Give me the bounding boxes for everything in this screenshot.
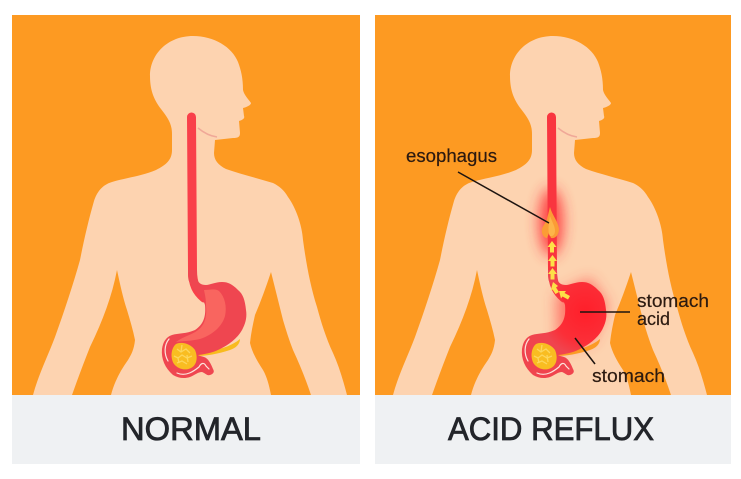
stomach organ [162,270,246,378]
stomach organ [522,270,606,378]
fat sliver [197,339,240,356]
panel: normal [12,15,360,464]
stomach wall [162,270,246,378]
label: stomach acid: stomach [637,291,709,311]
label: esophagus: esophagus [406,146,497,166]
yellow food mass [532,343,557,369]
jaw shadow [558,128,577,137]
caption bar [375,395,731,464]
pylorus highlight [165,339,209,374]
pointer: stomach acid [580,311,630,313]
arrow 3 [548,268,557,280]
caption bar [12,395,360,464]
inflammation glow: esophagus [539,188,563,256]
arrow 1 [548,241,556,252]
food texture [174,345,192,364]
label: stomach: stomach [592,366,665,386]
duodenum yellow food mass [172,343,197,369]
esophagus [192,117,204,298]
stomach light inner [176,289,226,342]
icon: heartburn flame [542,207,559,238]
caption: acid reflux: ACID REFLUX [448,411,654,447]
arrow 4 [550,282,559,294]
body silhouette [393,36,707,395]
inflammation glow: stomach [556,278,608,350]
panel: acid reflux [375,15,731,464]
caption: normal: NORMAL [121,411,261,447]
pointer: stomach [575,338,595,364]
body silhouette [33,36,347,395]
arrow 5 [559,291,570,300]
fat sliver [557,339,600,356]
panel background [12,15,360,395]
flame outer [542,207,559,238]
reflux arrows [548,241,570,300]
pointer: esophagus [458,172,549,223]
esophagus [552,117,564,298]
panel background [375,15,731,395]
arrow 2 [548,255,557,266]
label: stomach acid: acid [637,309,670,329]
jaw shadow [198,128,217,137]
flame inner [548,216,555,236]
food texture [534,345,552,364]
pylorus highlight [525,339,569,374]
stomach wall [522,270,606,378]
